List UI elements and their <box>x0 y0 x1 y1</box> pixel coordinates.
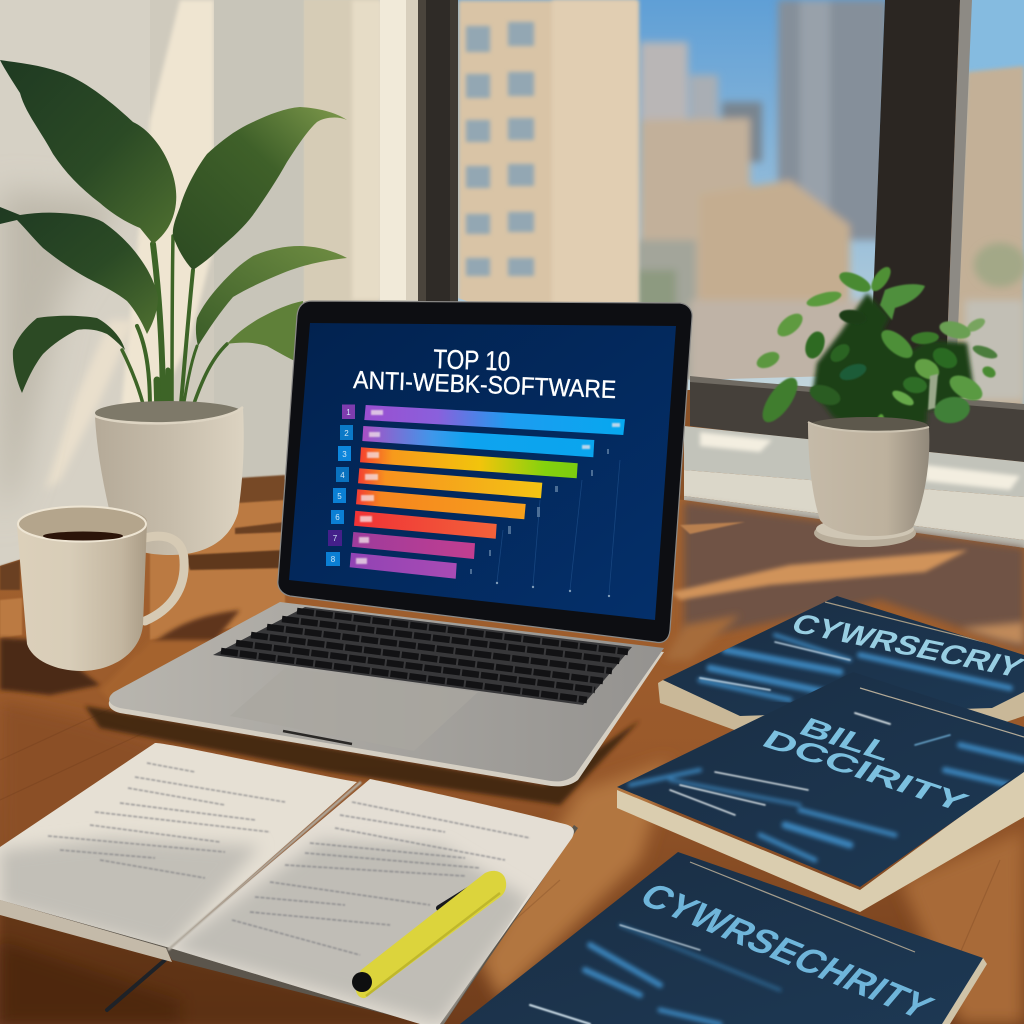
mug handle <box>145 536 184 621</box>
leaf: lower left <box>13 316 125 393</box>
leaf: upper left <box>0 60 176 244</box>
right plant <box>754 264 999 547</box>
left sunlit wood and stripes <box>150 495 285 640</box>
rank icons: 1 <box>346 408 351 417</box>
spine gutter <box>168 782 361 950</box>
window ledge <box>684 426 1024 548</box>
left page <box>0 743 357 950</box>
laptop hinge notch <box>283 731 352 744</box>
leaves <box>754 264 999 433</box>
notebook page edge <box>0 825 578 1024</box>
wooden table <box>0 475 1024 1024</box>
wall background <box>0 0 420 600</box>
magazine title <box>756 712 975 817</box>
left plant <box>0 60 347 555</box>
trackpad <box>230 668 478 751</box>
laptop <box>85 301 692 805</box>
leaf: middle left <box>0 207 158 334</box>
laptop base shadow <box>85 706 640 805</box>
bar chart <box>350 405 625 579</box>
laptop screen <box>289 323 676 620</box>
far right shaded wood <box>684 502 1024 650</box>
window frame <box>418 0 1024 462</box>
mug body <box>17 507 147 671</box>
pages <box>938 958 987 1024</box>
value marks <box>470 449 609 574</box>
coffee mug <box>17 506 184 671</box>
leaf: lower right <box>227 301 303 362</box>
window view: city buildings <box>458 0 1024 410</box>
magazine title: BILL <box>793 712 900 766</box>
right plant pot <box>808 417 929 547</box>
mug rim <box>18 506 146 542</box>
magazine title: CYWRSECHRITY <box>632 876 942 1024</box>
rank icons: 4 <box>340 471 345 480</box>
screen title: TOP 10 <box>433 344 511 377</box>
rank icons: 7 <box>333 534 338 543</box>
leaf: upper right <box>173 107 347 270</box>
magazine title: CYWRSECRIY <box>785 609 1024 683</box>
screen title <box>353 344 617 404</box>
rank icons <box>326 404 355 566</box>
laptop lid <box>278 301 692 642</box>
rank icons: 3 <box>342 450 347 459</box>
yellow pen <box>352 871 506 998</box>
magazine top <box>658 596 1024 732</box>
rank icons: 2 <box>344 429 349 438</box>
plant shadow on wall <box>0 190 120 520</box>
axis dots <box>496 582 610 597</box>
pages <box>658 680 1024 732</box>
bar labels <box>356 410 620 564</box>
plant pot <box>95 401 244 555</box>
cover <box>663 596 1024 716</box>
leaf: middle right <box>196 246 347 346</box>
pages <box>617 770 1024 912</box>
laptop base lip <box>109 606 664 786</box>
chart grid lines <box>497 460 620 594</box>
foliage core <box>813 293 973 430</box>
cover <box>460 852 983 1024</box>
magazine title: DCCIRITY <box>756 724 975 817</box>
rank icons: 5 <box>337 492 342 501</box>
rank icons: 6 <box>335 513 340 522</box>
keyboard <box>213 607 632 705</box>
laptop base <box>109 602 664 781</box>
rank icons: 8 <box>331 555 336 564</box>
stems <box>122 236 227 415</box>
magazine bottom <box>460 852 987 1024</box>
screen title: ANTI-WEBK-SOFTWARE <box>353 366 617 404</box>
cover <box>617 672 1024 887</box>
magazine middle <box>617 672 1024 912</box>
notebook <box>0 743 578 1024</box>
coffee <box>43 532 123 540</box>
ribbon <box>107 960 165 1010</box>
right page <box>170 779 574 1024</box>
notebook shadow <box>0 905 440 1024</box>
